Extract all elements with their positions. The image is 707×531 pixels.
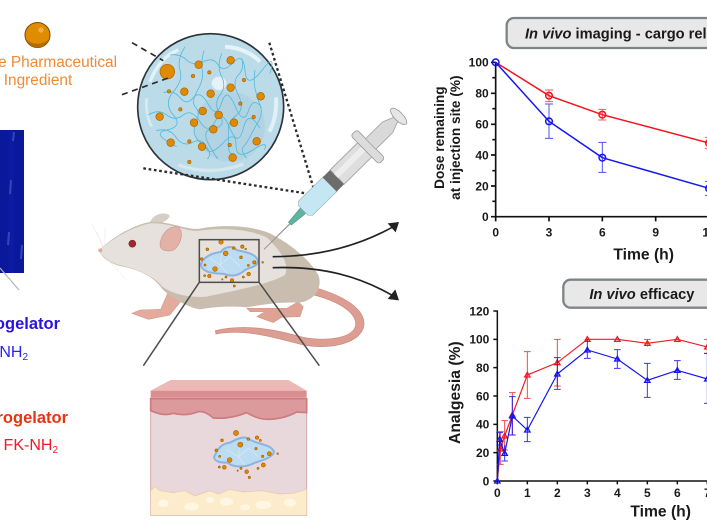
mouse tail [215,287,364,347]
mouse nose [98,248,102,252]
subcutaneous fat [151,487,307,515]
label: active pharmaceutical ingredient: Ingredient [4,72,73,89]
injection site hydrogel depot [200,240,263,287]
magnified hydrogel circle [138,34,284,180]
y tick labels: 100 [469,56,489,70]
mouse front foot [132,292,181,319]
y tick labels [469,56,489,224]
hydrogel magnified view with syringe [122,34,416,254]
epidermis layer [151,399,307,419]
y tick labels: 0 [483,474,490,488]
x tick labels: 9 [652,226,659,240]
zoom lines to skin section [143,282,319,366]
y axis title: Dose remaining [432,86,447,189]
mouse ear back [150,213,170,224]
skin cross-section [151,380,307,515]
arrow to imaging chart [273,222,399,257]
dotted zoom lines to syringe [143,43,317,195]
dermis [151,398,307,515]
x tick labels: 3 [584,486,591,500]
x tick labels: 3 [546,226,553,240]
y tick labels: 0 [482,210,489,224]
x tick labels: 6 [674,486,681,500]
heading pill: in vivo imaging [507,18,707,48]
x tick labels [492,226,707,240]
label: blue peptide sequence: NH [0,344,22,361]
dashed zoom lines from nanoparticle [122,43,170,95]
y axis title: Analgesia (%) [447,341,464,444]
inset box on mouse [199,240,259,282]
y tick labels: 20 [475,179,489,193]
x axis title: Time (h) [613,246,674,263]
heading pill: in vivo efficacy [563,280,707,308]
mouse back foot [247,302,303,323]
y tick labels: 60 [475,118,489,132]
mouse illustration [92,213,399,366]
x tick labels: 1 [524,486,531,500]
icon: syringe [259,99,416,254]
y tick labels: 60 [476,389,490,403]
mouse body [99,222,320,309]
hydrogel depot in skin [214,430,278,478]
arrow to efficacy chart [273,267,399,300]
blue series [495,339,707,483]
mouse eye [129,240,136,247]
mouse ear [160,227,181,251]
line chart: in vivo efficacy [447,280,707,521]
red series [497,337,707,481]
x tick labels: 4 [614,486,621,500]
x tick labels: 0 [492,226,499,240]
label: red peptide sequence: FK-NH [4,437,52,454]
image panel: blue microscopy crop [0,130,24,273]
y tick labels: 80 [476,361,490,375]
x tick labels: 6 [599,226,606,240]
blue series [492,59,707,195]
y tick labels: 100 [469,333,490,347]
line chart: in vivo imaging cargo release [432,18,707,263]
mouse lighter fur [100,223,286,297]
stratum band [151,391,307,398]
x tick labels: 5 [644,486,651,500]
label: blue peptide sequence: 2 [22,352,28,363]
needle insertion [264,224,290,249]
y tick labels: 120 [469,304,490,318]
heading pill: in vivo efficacy: In vivo efficacy [589,287,695,303]
axes [491,62,707,221]
icon: active pharmaceutical ingredient sphere [25,22,50,48]
y tick labels: 40 [476,418,490,432]
label: red peptide sequence: 2 [52,445,58,456]
red series [496,62,707,149]
x tick labels: 2 [554,486,561,500]
y tick labels: 80 [475,87,489,101]
label: active pharmaceutical ingredient [0,54,117,89]
y axis title: at injection site (%) [448,75,463,200]
axes [493,310,707,484]
y tick labels: 20 [476,446,490,460]
x tick labels: 0 [494,486,501,500]
y tick labels [469,304,490,488]
x axis title: Time (h) [630,504,691,521]
fat lobules [158,497,296,511]
mouse whiskers [92,223,155,280]
y axis title [432,75,463,200]
connector line from microscopy crop [0,268,19,290]
x tick labels [494,486,707,500]
epidermis top face [151,380,307,391]
y tick labels: 40 [475,148,489,162]
